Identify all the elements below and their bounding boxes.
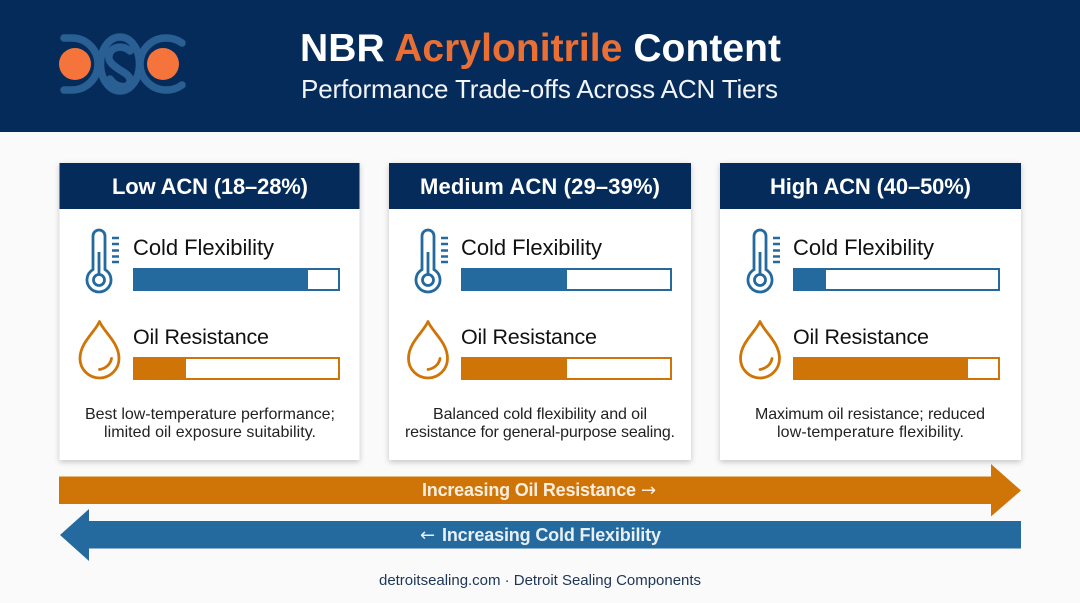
bar: oil resistance: [133, 357, 339, 380]
label: oil resistance: Oil Resistance: [461, 325, 597, 349]
icon: oil drop: [740, 322, 780, 378]
arrow: increasing cold flexibility: Increasing Cold Flexibility: [442, 525, 661, 545]
label: oil resistance: Oil Resistance: [793, 325, 929, 349]
title: NBR Acrylonitrile Content: [300, 27, 781, 70]
arrow: increasing oil resistance: Increasing Oil Resistance: [422, 480, 636, 500]
icon: oil drop: [408, 322, 448, 378]
icon: thermometer: [87, 230, 119, 292]
description: limited oil exposure suitability.: [104, 424, 316, 441]
subtitle: Performance Trade-offs Across ACN Tiers: [301, 74, 778, 104]
bar: cold flexibility: [133, 268, 339, 291]
heading: medium ACN: Medium ACN (29–39%): [420, 174, 660, 199]
bar: oil resistance: [461, 357, 671, 380]
description: [755, 406, 985, 441]
panel: high ACN: [720, 163, 1021, 460]
icon: thermometer: [748, 230, 780, 292]
header banner: [0, 0, 1080, 132]
description: low-temperature flexibility.: [777, 424, 964, 441]
icon: oil drop: [80, 322, 119, 378]
arrow: increasing cold flexibility: ←: [420, 525, 435, 546]
arrow: increasing oil resistance: [59, 464, 1021, 516]
label: cold flexibility: Cold Flexibility: [461, 235, 602, 260]
label: cold flexibility: Cold Flexibility: [133, 235, 274, 260]
label: oil resistance: Oil Resistance: [133, 325, 269, 349]
bar: cold flexibility: [793, 268, 999, 291]
panel: low ACN: [60, 163, 360, 460]
bar: cold flexibility: [461, 268, 671, 291]
arrow: increasing cold flexibility: [60, 509, 1021, 561]
description: resistance for general-purpose sealing.: [405, 424, 675, 441]
description: [85, 406, 335, 441]
heading: high ACN: High ACN (40–50%): [770, 174, 971, 199]
description: Best low-temperature performance;: [85, 406, 335, 423]
logo: [59, 37, 182, 91]
label: cold flexibility: Cold Flexibility: [793, 235, 934, 260]
arrow: increasing oil resistance: →: [641, 480, 656, 501]
description: Maximum oil resistance; reduced: [755, 406, 985, 423]
bar: oil resistance: [793, 357, 999, 380]
heading: low ACN: Low ACN (18–28%): [112, 174, 308, 199]
icon: thermometer: [416, 230, 448, 292]
description: [405, 406, 675, 441]
description: Balanced cold flexibility and oil: [433, 406, 647, 423]
panel: medium ACN: [389, 163, 691, 460]
footer: detroitsealing.com · Detroit Sealing Components: [379, 572, 701, 589]
